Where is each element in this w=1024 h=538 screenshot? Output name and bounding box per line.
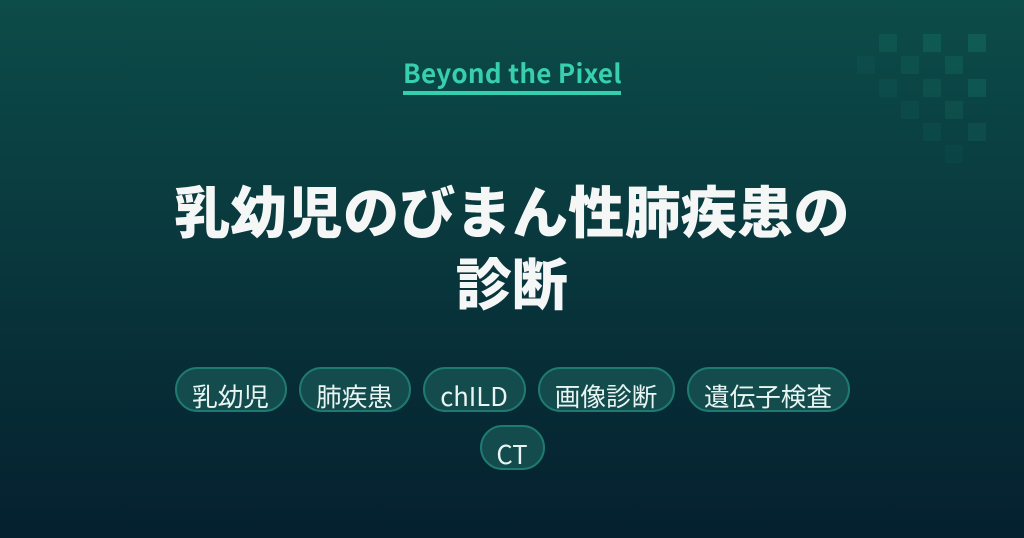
tag: 遺伝子検査: 遺伝子検査 — [704, 376, 832, 414]
tag: 乳幼児: 乳幼児 — [192, 376, 269, 414]
tag: CT: CT — [496, 434, 528, 472]
tag: 画像診断: 画像診断 — [555, 376, 657, 414]
tag: 肺疾患 — [299, 367, 411, 412]
tag: 画像診断 — [538, 367, 675, 412]
decorative pixel grid icon — [879, 34, 986, 141]
title: 乳幼児のびまん性肺疾患の — [174, 169, 850, 250]
tag: 乳幼児 — [175, 367, 287, 412]
brand heading: Beyond the Pixel: Beyond the Pixel — [403, 54, 622, 91]
tag: 遺伝子検査 — [687, 367, 850, 412]
tag: chILD — [423, 367, 526, 412]
tag: chILD: chILD — [440, 376, 508, 414]
title — [174, 169, 850, 322]
tags — [175, 367, 850, 472]
tag: 肺疾患: 肺疾患 — [316, 376, 393, 414]
tag: CT — [480, 425, 545, 470]
title: 診断 — [456, 241, 568, 322]
